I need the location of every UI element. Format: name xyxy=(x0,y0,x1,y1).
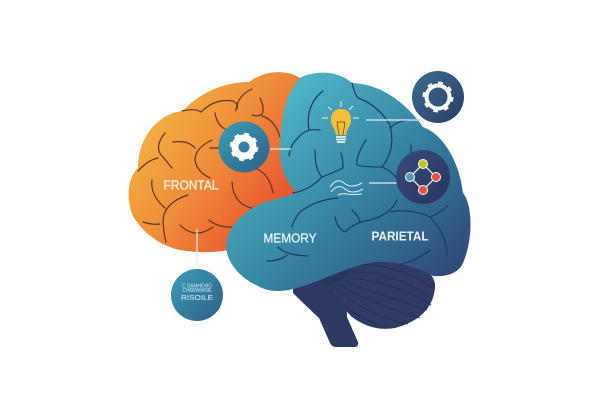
icon: waves xyxy=(330,181,363,195)
body folds xyxy=(267,83,448,265)
label: PARIETAL: PARIETAL xyxy=(372,230,429,244)
icon: network badge xyxy=(396,150,450,204)
frontal folds xyxy=(138,89,280,242)
callout: risk badge xyxy=(171,269,223,321)
parietal and temporal body xyxy=(226,73,470,291)
callout: risk badge: CHAWWWINE xyxy=(182,288,212,294)
icon: gear badge upper right xyxy=(412,71,464,123)
label: FRONTAL: FRONTAL xyxy=(164,178,219,192)
label: MEMORY: MEMORY xyxy=(264,232,317,246)
callout: risk badge: RISOILE xyxy=(181,293,213,302)
brain stem xyxy=(293,265,358,347)
cerebellum xyxy=(318,255,435,329)
icon: gear badge xyxy=(218,122,270,172)
icon: light bulb xyxy=(322,101,359,142)
frontal lobe xyxy=(129,72,300,252)
callout: risk badge: C DAMHEMO xyxy=(182,284,212,290)
connector lines xyxy=(197,120,422,268)
